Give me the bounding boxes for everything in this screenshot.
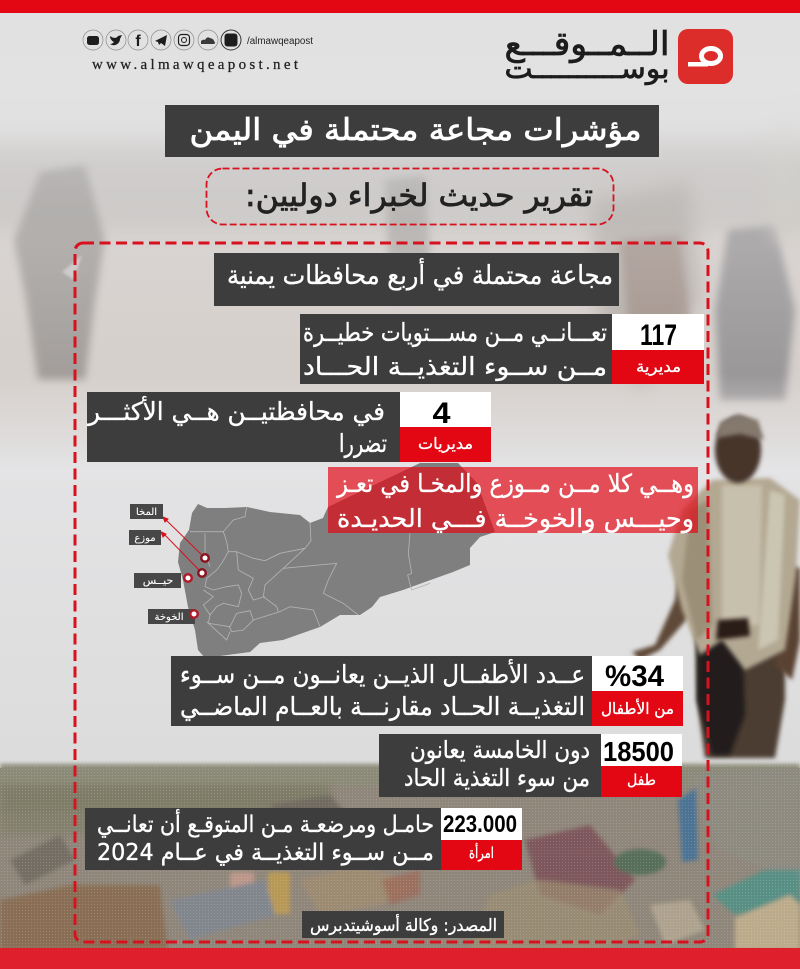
label: Khawkhah — [148, 609, 195, 624]
website address: www.almawqeapost.net — [92, 57, 299, 73]
social media icons and handle: /almawqeapost — [247, 36, 313, 47]
pin: Khawkhah — [189, 609, 199, 619]
map of Yemen — [129, 463, 495, 658]
title: مؤشرات مجاعة محتملة في اليمن — [190, 113, 642, 148]
label: Hays: حيــس — [143, 574, 173, 587]
social media icons and handle: f — [135, 33, 141, 50]
main dashed frame — [75, 243, 708, 942]
stat: 117 districts — [300, 314, 704, 384]
heading: four governorates — [214, 253, 619, 306]
callout arrows — [161, 517, 205, 573]
stat: 18500 children: من سوء التغذية الحاد — [404, 764, 590, 792]
stat: 18500 children: طفل — [627, 771, 656, 789]
logo: Almawqea Post — [504, 24, 733, 85]
stat: 4 districts — [86, 392, 491, 462]
red callout: district names: وحيـــس والخوخــة فـــي الحديـدة — [337, 504, 694, 534]
logo wordmark: الــمــوقـــع — [504, 24, 670, 63]
stat: 223,000 women: 223.000 — [443, 811, 517, 838]
label: Mocha: المخا — [136, 507, 157, 518]
label: Mawza — [129, 530, 161, 545]
subtitle in dashed frame: تقرير حديث لخبراء دوليين: — [245, 178, 593, 214]
subtitle in dashed frame — [206, 168, 614, 224]
stat: 4 districts: تضررا — [339, 429, 387, 458]
stat: 34% of children: %34 — [605, 660, 664, 693]
map land — [178, 463, 495, 658]
label: Mocha — [130, 504, 163, 519]
title — [165, 105, 659, 157]
pin: Mawza — [197, 568, 207, 578]
red callout: district names — [328, 467, 698, 534]
logo mark — [678, 29, 733, 84]
stat: 4 districts: مديريات — [418, 434, 473, 454]
stat: 4 districts: في محافظتيــن هــي الأكثـــر — [86, 395, 385, 426]
stat: 18500 children: 18500 — [603, 736, 674, 767]
stat: 4 districts: 4 — [432, 397, 451, 430]
stat: 223,000 women — [85, 808, 522, 870]
stat: 223,000 women: حامـل ومرضعـة مـن المتوقـع أن تعانــي — [97, 809, 434, 838]
pin: Hays — [183, 573, 193, 583]
stat: 18500 children: دون الخامسة يعانون — [410, 736, 590, 764]
governorate borders — [190, 507, 430, 640]
logo wordmark — [504, 24, 670, 85]
label: Khawkhah: الخوخة — [154, 612, 184, 623]
label: Mawza: موزع — [134, 533, 156, 544]
background photo: displaced camp on the ground — [0, 764, 800, 950]
stat: 34% of children: عــدد الأطفــال الذيــن يعانــون مــن ســوء — [180, 658, 585, 689]
stat: 223,000 women: مــن ســوء التغذيــة في عــام 2024 — [97, 840, 434, 866]
stat: 117 districts: مديرية — [636, 357, 681, 377]
label: Hays — [134, 573, 181, 588]
source credit: المصدر: وكالة أسوشيتدبرس — [310, 914, 497, 936]
source credit — [302, 911, 504, 938]
stat: 117 districts: مــن ســوء التغذيــة الحـــاد — [303, 352, 607, 381]
stat: 18500 children — [379, 734, 682, 797]
photo: malnourished man standing — [632, 414, 800, 758]
heading: four governorates: مجاعة محتملة في أربع محافظات يمنية — [227, 257, 613, 291]
stat: 223,000 women: امرأة — [469, 843, 494, 862]
stat: 34% of children — [171, 656, 683, 726]
social media icons and handle — [83, 30, 313, 50]
stat: 117 districts: 117 — [640, 319, 677, 352]
top red bar — [0, 0, 800, 13]
stat: 34% of children: التغذيــة الحــاد مقارنـــة بالعــام الماضــي — [180, 692, 585, 721]
logo wordmark: بوســــــــــت — [504, 52, 670, 85]
stat: 117 districts: تعـــانــي مــن مســـتويات خطيــرة — [303, 318, 607, 347]
pin: Mocha — [200, 553, 210, 563]
bottom red bar — [0, 948, 800, 969]
stat: 34% of children: من الأطفال — [601, 698, 674, 719]
red callout: district names: وهــي كلا مــن مــوزع والمخـا في تعـز — [335, 469, 694, 499]
